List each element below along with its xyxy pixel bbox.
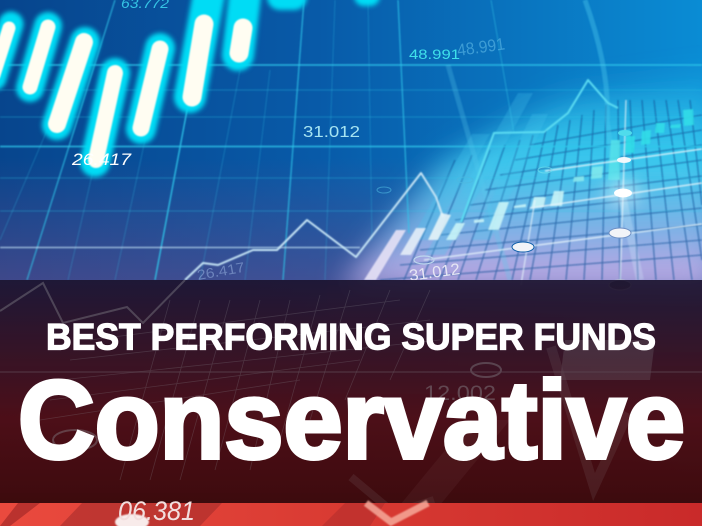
translucent background bars [410,93,548,255]
light candle bars [364,109,694,280]
node connector lines [424,100,702,290]
heading: best performing super funds: BEST PERFORMING SUPER FUNDS [46,316,656,358]
chart value labels: 31.012 [303,124,360,141]
chart value labels: 26.417 [196,259,246,283]
dark title band [0,280,702,503]
glowing candlesticks [0,0,370,162]
chart value labels: 48.991 [409,47,460,62]
chart value labels: 31.012 [408,261,461,285]
ghost value label: 12.002 [424,382,496,405]
horizontal and perspective grid lines [0,0,702,280]
title: conservative: Conservative [18,359,685,482]
chart value labels: 26.417 [71,150,132,169]
chart value labels [71,0,506,285]
red bottom strip [0,503,702,526]
chart nodes [377,130,640,290]
ghost chart details in band [0,280,702,513]
perspective data grid [340,70,702,290]
bottom value label: 06.381 [118,496,195,526]
line chart [185,80,618,280]
chart value labels: 48.991 [456,34,506,60]
